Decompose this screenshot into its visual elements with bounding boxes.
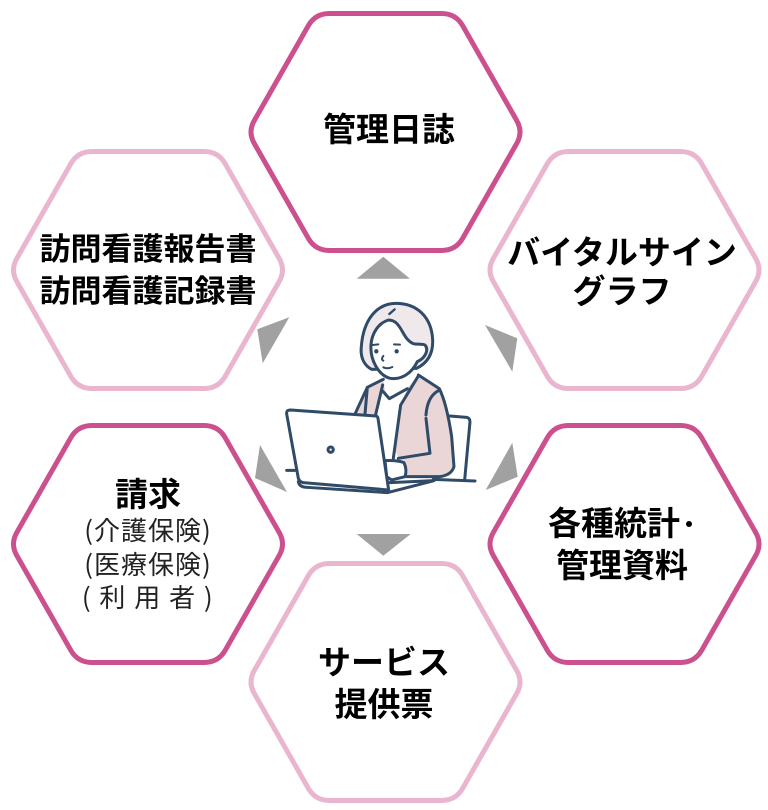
panel: 管理日誌 bbox=[251, 14, 520, 250]
arrow: lower right bbox=[486, 443, 518, 490]
panel: 請求: (医療保険) bbox=[84, 545, 212, 582]
arrow: bottom bbox=[357, 534, 411, 556]
illustration: person at laptop bbox=[287, 303, 475, 493]
laptop base bbox=[298, 481, 434, 493]
panel: バイタルサイングラフ bbox=[490, 152, 759, 388]
laptop screen bbox=[287, 410, 389, 490]
hand bbox=[385, 461, 406, 480]
panel: 訪問看護報告書・記録書: 訪問看護報告書 bbox=[40, 224, 256, 269]
panel: バイタルサイングラフ: グラフ bbox=[572, 265, 672, 313]
panel: 各種統計・管理資料: 管理資料 bbox=[556, 539, 688, 587]
jacket fill bbox=[355, 375, 454, 477]
panel: サービス提供票 bbox=[251, 564, 520, 800]
shirt fill bbox=[376, 388, 407, 460]
panel: 訪問看護報告書・記録書: 訪問看護記録書 bbox=[40, 266, 256, 311]
panel: 訪問看護報告書・記録書 bbox=[14, 152, 282, 388]
chair and desk bbox=[287, 416, 475, 481]
panel: 各種統計・管理資料 bbox=[490, 426, 759, 662]
panel: 管理日誌: 管理日誌 bbox=[323, 103, 455, 151]
face bbox=[371, 320, 427, 379]
panel: 請求: ( 利 用 者 ) bbox=[82, 578, 214, 615]
panel: サービス提供票: 提供票 bbox=[334, 678, 434, 726]
panel: 請求 bbox=[14, 426, 282, 662]
arrow: upper right bbox=[485, 325, 517, 372]
arrow: lower left bbox=[255, 445, 287, 492]
panel: 請求: 請求 bbox=[115, 468, 181, 516]
panel: バイタルサイングラフ: バイタルサイン bbox=[507, 226, 737, 274]
arrow: top bbox=[357, 257, 410, 279]
panel: サービス提供票: サービス bbox=[318, 636, 450, 684]
panel: 請求: (介護保険) bbox=[84, 511, 212, 548]
jacket lines bbox=[355, 375, 454, 477]
panel: 各種統計・管理資料: 各種統計 bbox=[548, 497, 680, 545]
arrow: upper left bbox=[257, 317, 289, 363]
hair bbox=[361, 303, 433, 369]
